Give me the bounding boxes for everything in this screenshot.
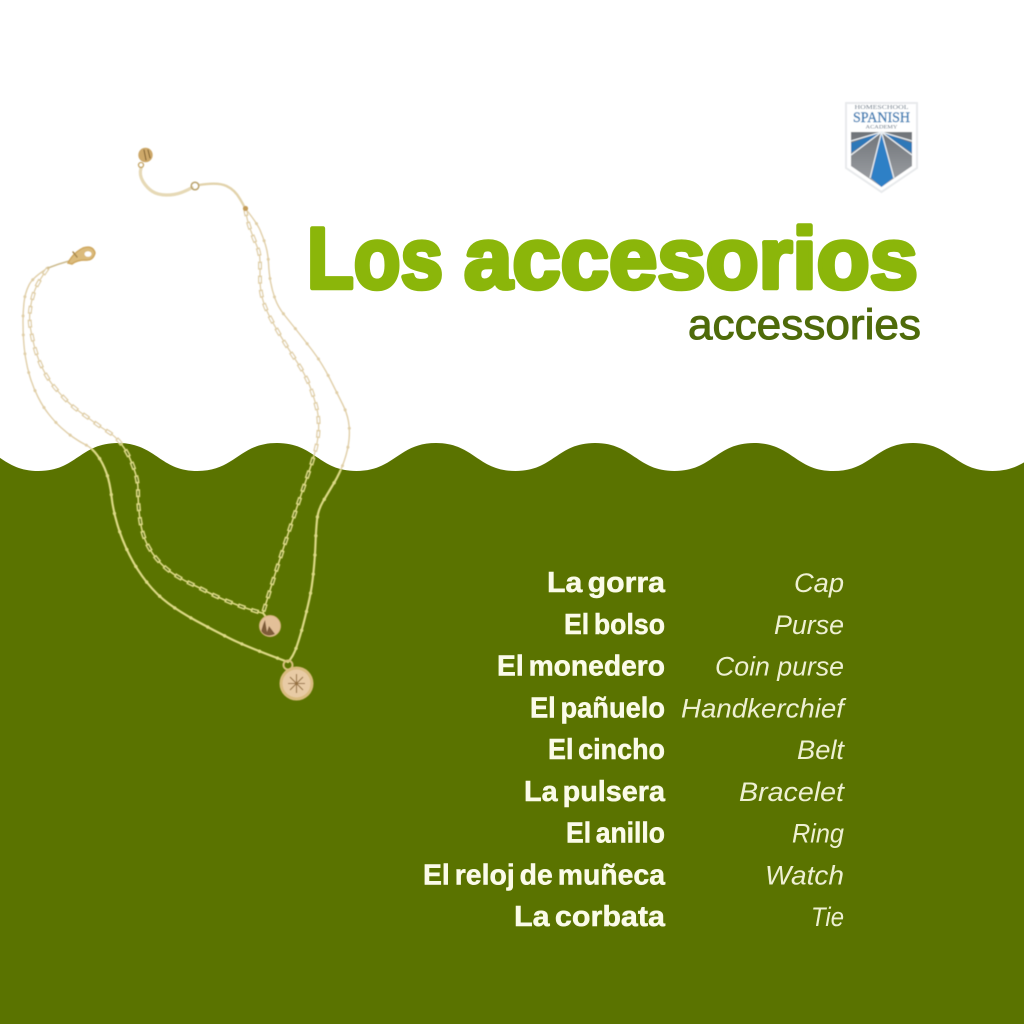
row: La gorra / Cap: Cap (794, 568, 844, 598)
subtitle: accessories (688, 301, 921, 349)
logo: Homeschool Spanish Academy shield: SPANISH (853, 110, 910, 126)
row: La gorra / Cap (547, 567, 844, 599)
title: Los (307, 211, 443, 307)
row: El reloj de muñeca / Watch: Watch (765, 860, 844, 890)
row: El cincho / Belt (548, 734, 846, 766)
row: La corbata / Tie: La corbata (514, 901, 666, 933)
row: El reloj de muñeca / Watch (423, 859, 844, 891)
row: El monedero / Coin purse: Coin purse (715, 652, 844, 682)
row: La gorra / Cap: La gorra (547, 567, 666, 599)
row: La pulsera / Bracelet: Bracelet (739, 777, 846, 807)
row: El cincho / Belt: El cincho (548, 734, 665, 766)
row: La corbata / Tie (514, 901, 844, 933)
vocabulary list (423, 567, 847, 933)
row: El monedero / Coin purse: El monedero (497, 650, 665, 682)
lobster clasp (48, 247, 95, 268)
row: El bolso / Purse: El bolso (564, 609, 665, 641)
small round pendant (260, 613, 280, 636)
row: El cincho / Belt: Belt (797, 735, 846, 765)
extender chain with end disc (138, 148, 248, 211)
logo: Homeschool Spanish Academy shield (846, 103, 917, 192)
row: El pañuelo / Handkerchief: Handkerchief (681, 693, 847, 723)
row: El pañuelo / Handkerchief (530, 692, 847, 724)
logo: Homeschool Spanish Academy shield: HOMESCHOOL (854, 104, 909, 111)
row: La pulsera / Bracelet: La pulsera (524, 776, 666, 808)
row: El monedero / Coin purse (497, 650, 844, 682)
row: El anillo / Ring: Ring (792, 818, 844, 848)
row: La corbata / Tie: Tie (811, 902, 844, 932)
logo: Homeschool Spanish Academy shield: ACADEMY (866, 124, 898, 130)
row: La pulsera / Bracelet (524, 776, 846, 808)
title: accesorios (464, 211, 918, 307)
row: El bolso / Purse: Purse (774, 610, 844, 640)
row: El reloj de muñeca / Watch: El reloj de muñeca (423, 859, 666, 891)
icon: gold layered necklace (23, 148, 349, 701)
row: El bolso / Purse (564, 609, 844, 641)
large star medallion pendant (280, 660, 314, 700)
green wavy panel (0, 443, 1024, 1024)
row: El anillo / Ring: El anillo (566, 818, 665, 850)
row: El anillo / Ring (566, 818, 844, 850)
row: El pañuelo / Handkerchief: El pañuelo (530, 692, 665, 724)
